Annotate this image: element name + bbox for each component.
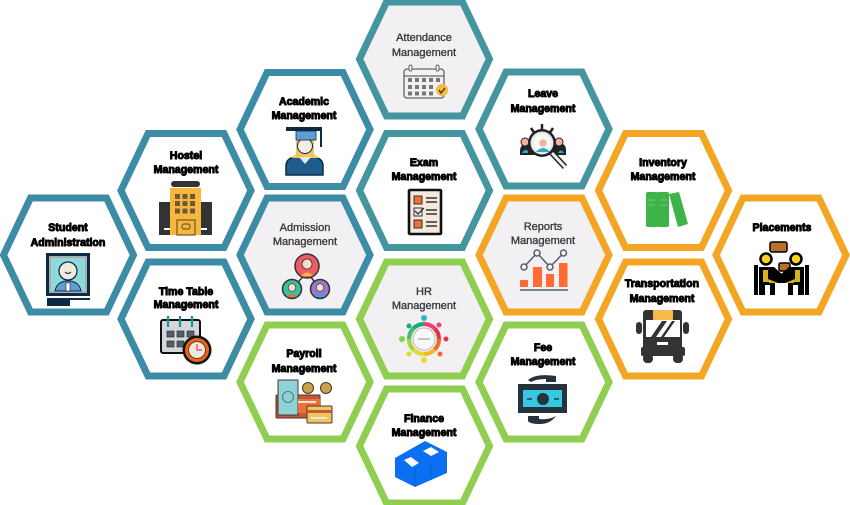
heading: Academic Management: Academic bbox=[279, 96, 329, 108]
panel: Finance Management bbox=[360, 389, 490, 503]
icon: student portrait on screen bbox=[46, 253, 90, 306]
heading: Student Administration: Student bbox=[48, 222, 88, 234]
heading: Reports Management: Management bbox=[511, 235, 575, 247]
heading: Attendance Management: Attendance bbox=[396, 32, 452, 44]
heading: Hostel Management: Hostel bbox=[170, 150, 202, 162]
icon: stack of blue money bbox=[395, 441, 447, 487]
heading: Time Table Management: Management bbox=[154, 299, 219, 311]
heading: HR Management: Management bbox=[392, 300, 456, 312]
icon: calendar with clock bbox=[161, 316, 212, 364]
panel: Leave Management bbox=[479, 72, 609, 186]
heading: Fee Management: Fee bbox=[534, 342, 552, 354]
heading: Finance Management: Management bbox=[392, 427, 457, 439]
panel: Time Table Management bbox=[121, 262, 251, 376]
heading: Leave Management: Management bbox=[511, 103, 576, 115]
heading: HR Management: HR bbox=[416, 286, 432, 298]
heading: Admission Management: Admission bbox=[280, 222, 330, 234]
heading: Fee Management: Management bbox=[511, 356, 576, 368]
panel: Inventory Management bbox=[598, 134, 728, 248]
panel: Hostel Management bbox=[121, 134, 251, 248]
icon: graduate bbox=[286, 127, 323, 175]
heading: Transportation Management: Transportation bbox=[625, 278, 699, 290]
heading: Payroll Management: Management bbox=[272, 363, 337, 375]
panel: Reports Management bbox=[479, 198, 609, 312]
icon: exam checklist bbox=[409, 190, 441, 234]
icon: hostel building bbox=[159, 181, 212, 235]
panel: Student Administration bbox=[4, 198, 134, 312]
panel: Exam Management bbox=[360, 134, 490, 248]
heading: Finance Management: Finance bbox=[404, 413, 444, 425]
icon: payroll money and cards bbox=[276, 380, 332, 423]
panel: Attendance Management bbox=[360, 2, 490, 116]
heading: Student Administration: Administration bbox=[31, 237, 105, 249]
panel: Academic Management bbox=[240, 72, 370, 186]
panel: Transportation Management bbox=[598, 262, 728, 376]
icon: bus bbox=[636, 310, 689, 363]
heading: Hostel Management: Management bbox=[154, 164, 219, 176]
panel: HR Management bbox=[360, 262, 490, 376]
heading: Placements: Placements bbox=[753, 222, 812, 234]
icon: attendance calendar bbox=[404, 65, 448, 98]
icon: colourful HR gear bbox=[399, 315, 448, 363]
heading: Exam Management: Exam bbox=[410, 157, 438, 169]
heading: Reports Management: Reports bbox=[524, 221, 563, 233]
panel: Placements bbox=[716, 198, 846, 312]
panel: Payroll Management bbox=[240, 325, 370, 439]
icon: admission people network bbox=[282, 254, 330, 298]
icon: banknote with exchange arrows bbox=[518, 375, 567, 424]
icon: green books bbox=[646, 192, 688, 227]
heading: Payroll Management: Payroll bbox=[286, 348, 322, 360]
heading: Time Table Management: Time Table bbox=[159, 286, 213, 298]
panel: Fee Management bbox=[479, 325, 609, 439]
heading: Inventory Management: Management bbox=[631, 171, 696, 183]
icon: reports bar and line chart bbox=[520, 250, 568, 290]
heading: Inventory Management: Inventory bbox=[639, 157, 687, 169]
heading: Transportation Management: Management bbox=[630, 293, 695, 305]
icon: magnifier over people bbox=[520, 124, 566, 167]
heading: Admission Management: Management bbox=[273, 236, 337, 248]
panel: Admission Management bbox=[240, 198, 370, 312]
heading: Academic Management: Management bbox=[272, 110, 337, 122]
heading: Exam Management: Management bbox=[392, 171, 457, 183]
icon: two people in interview bbox=[754, 242, 809, 295]
heading: Attendance Management: Management bbox=[392, 47, 456, 59]
heading: Leave Management: Leave bbox=[528, 88, 558, 100]
